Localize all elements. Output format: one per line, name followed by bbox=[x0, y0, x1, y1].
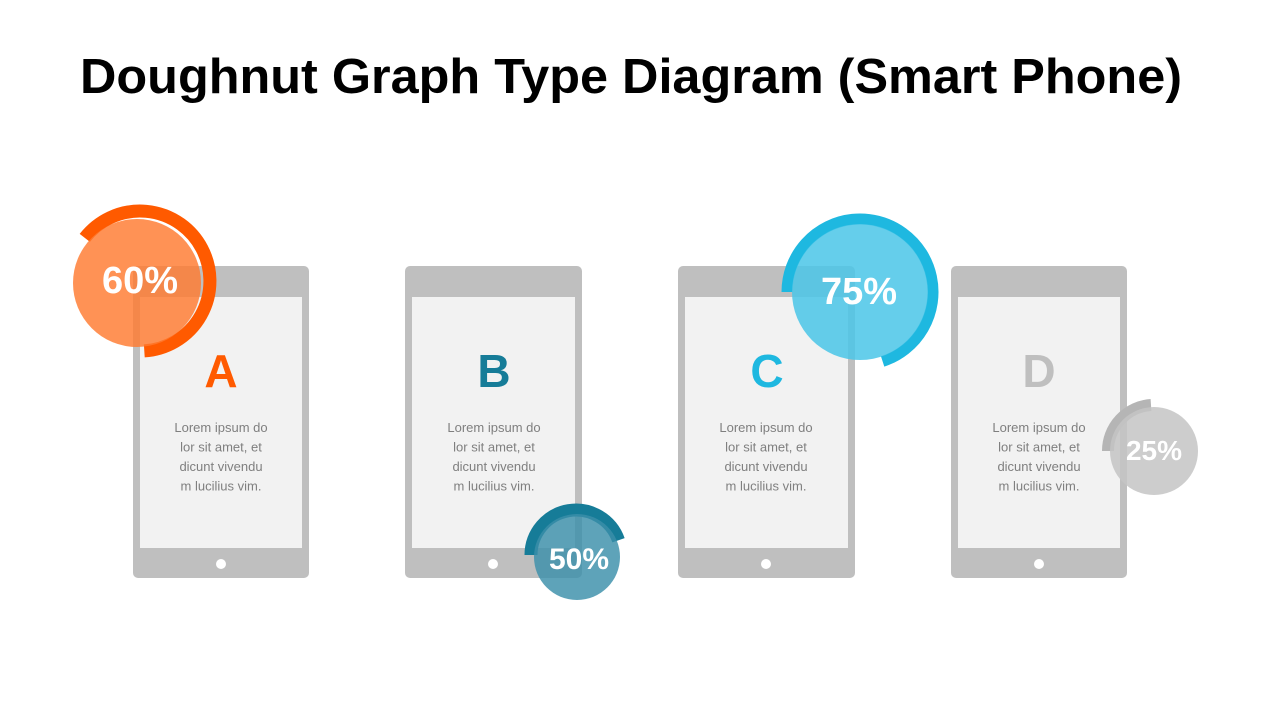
chart: doughnut 50%: 50% bbox=[549, 543, 609, 576]
panel: phone B bbox=[405, 266, 582, 578]
text block D: dicunt vivendu bbox=[997, 459, 1081, 474]
chart: doughnut 25% bbox=[1108, 405, 1198, 495]
letter C: C bbox=[750, 345, 784, 397]
text block C: Lorem ipsum do bbox=[719, 420, 813, 435]
chart: doughnut 60%: 60% bbox=[102, 260, 178, 302]
panel: phone C bbox=[678, 266, 855, 578]
text block B: m lucilius vim. bbox=[454, 478, 534, 494]
chart: doughnut 50% bbox=[531, 510, 620, 600]
text block A: dicunt vivendu bbox=[179, 459, 263, 474]
text block C: dicunt vivendu bbox=[724, 459, 808, 474]
chart: doughnut 75%: 75% bbox=[821, 271, 897, 313]
text block D: Lorem ipsum do bbox=[992, 420, 1086, 435]
text block D: lor sit amet, et bbox=[998, 440, 1080, 454]
text block B: dicunt vivendu bbox=[452, 459, 536, 474]
letter B: B bbox=[477, 345, 511, 397]
text block A: m lucilius vim. bbox=[181, 478, 261, 494]
letter A: A bbox=[204, 345, 238, 397]
text block C: lor sit amet, et bbox=[725, 440, 807, 454]
text block A: lor sit amet, et bbox=[180, 440, 262, 454]
text block D: m lucilius vim. bbox=[999, 478, 1079, 494]
letter D: D bbox=[1022, 345, 1056, 397]
text block B: Lorem ipsum do bbox=[447, 420, 541, 435]
text block B: lor sit amet, et bbox=[453, 440, 535, 454]
text block A: Lorem ipsum do bbox=[174, 420, 268, 435]
panel: phone A bbox=[133, 266, 309, 578]
chart: doughnut 60% bbox=[73, 211, 210, 351]
text block C: m lucilius vim. bbox=[726, 478, 806, 494]
chart: doughnut 25%: 25% bbox=[1126, 435, 1182, 466]
title: Doughnut Graph Type Diagram (Smart Phone) bbox=[80, 50, 1182, 104]
panel: phone D bbox=[951, 266, 1127, 578]
chart: doughnut 75% bbox=[787, 219, 933, 361]
